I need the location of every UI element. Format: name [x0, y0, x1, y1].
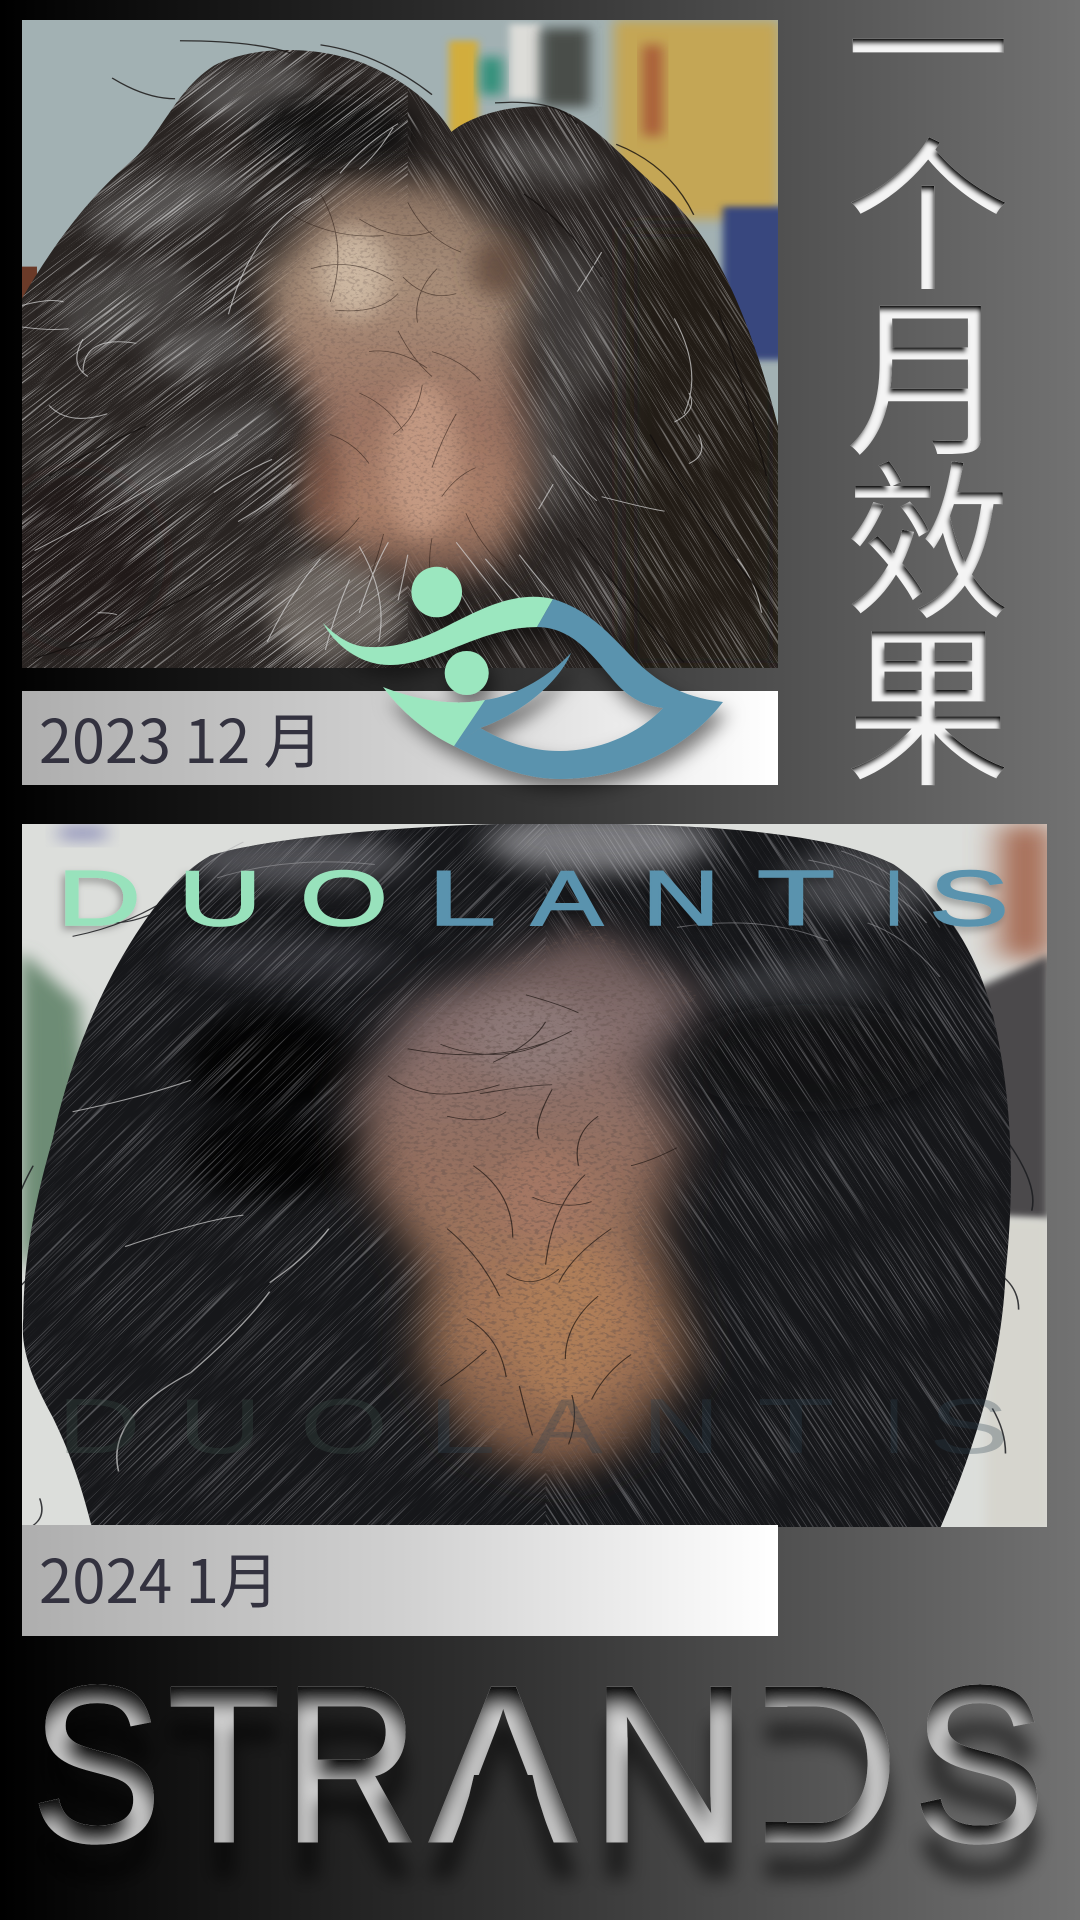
- STRANDS engraved wordmark: D: [750, 1641, 898, 1889]
- STRANDS engraved wordmark: R: [284, 1641, 418, 1889]
- faint DUOLANTIS watermark: N: [642, 1382, 720, 1470]
- logo: blue crescent: [454, 653, 571, 746]
- vertical title 一个月效果: 月: [846, 243, 1010, 491]
- head of hair: [22, 50, 778, 668]
- logo: mint upper swoosh: [323, 597, 553, 665]
- vertical title 一个月效果: 果: [846, 567, 1010, 823]
- STRANDS engraved wordmark: T: [168, 1641, 280, 1889]
- date label: December 2023: [22, 691, 778, 785]
- faint DUOLANTIS watermark: U: [178, 1382, 262, 1470]
- DUOLANTIS wordmark: S: [929, 854, 1009, 942]
- faint DUOLANTIS watermark: T: [757, 1382, 835, 1470]
- DUOLANTIS wordmark: D: [57, 854, 141, 942]
- vertical title 一个月效果: 个: [846, 85, 1010, 324]
- photo backdrop: [22, 20, 778, 426]
- date text 2023 12 月: 2023 12 月: [39, 694, 323, 781]
- bald scalp area: [349, 914, 716, 1480]
- faint DUOLANTIS watermark: D: [57, 1382, 141, 1470]
- faint DUOLANTIS watermark: [57, 1382, 1009, 1470]
- bald scalp area: [253, 178, 543, 592]
- vertical title 一个月效果: [846, 0, 1010, 823]
- STRANDS engraved wordmark: A: [430, 1641, 576, 1889]
- date label: January 2024: [22, 1525, 778, 1636]
- individual hair strands: [20, 41, 766, 662]
- individual hair strands: [13, 842, 1033, 1525]
- STRANDS engraved wordmark: [38, 1684, 1046, 1890]
- faint DUOLANTIS watermark: A: [531, 1382, 603, 1470]
- DUOLANTIS logo mark: [323, 567, 723, 779]
- photo: before, December 2023: [22, 20, 778, 668]
- STRANDS engraved wordmark: N: [590, 1641, 748, 1889]
- STRANDS engraved wordmark: S: [32, 1641, 162, 1889]
- logo: mint lower swoosh: [383, 687, 485, 746]
- faint DUOLANTIS watermark: O: [300, 1382, 388, 1470]
- DUOLANTIS wordmark: A: [531, 854, 603, 942]
- faint DUOLANTIS watermark: L: [428, 1382, 496, 1470]
- photo backdrop: [20, 824, 1051, 1529]
- DUOLANTIS wordmark: L: [428, 854, 496, 942]
- DUOLANTIS wordmark: I: [884, 854, 904, 942]
- vertical title 一个月效果: 效: [846, 408, 1010, 654]
- photo: after, January 2024: [22, 596, 1047, 1527]
- faint DUOLANTIS watermark: S: [929, 1382, 1009, 1470]
- DUOLANTIS wordmark: O: [300, 854, 388, 942]
- date text 2024 1月: 2024 1月: [39, 1534, 279, 1621]
- logo: lower figure head: [445, 651, 489, 695]
- faint DUOLANTIS watermark: I: [884, 1382, 904, 1470]
- head of hair: [22, 824, 1011, 1527]
- logo: upper figure head: [411, 567, 462, 617]
- DUOLANTIS wordmark: U: [178, 854, 262, 942]
- DUOLANTIS wordmark: T: [757, 854, 835, 942]
- DUOLANTIS wordmark: N: [642, 854, 720, 942]
- DUOLANTIS wordmark: [57, 854, 1009, 942]
- logo: blue eye body: [454, 599, 723, 779]
- STRANDS engraved wordmark: S: [913, 1641, 1045, 1889]
